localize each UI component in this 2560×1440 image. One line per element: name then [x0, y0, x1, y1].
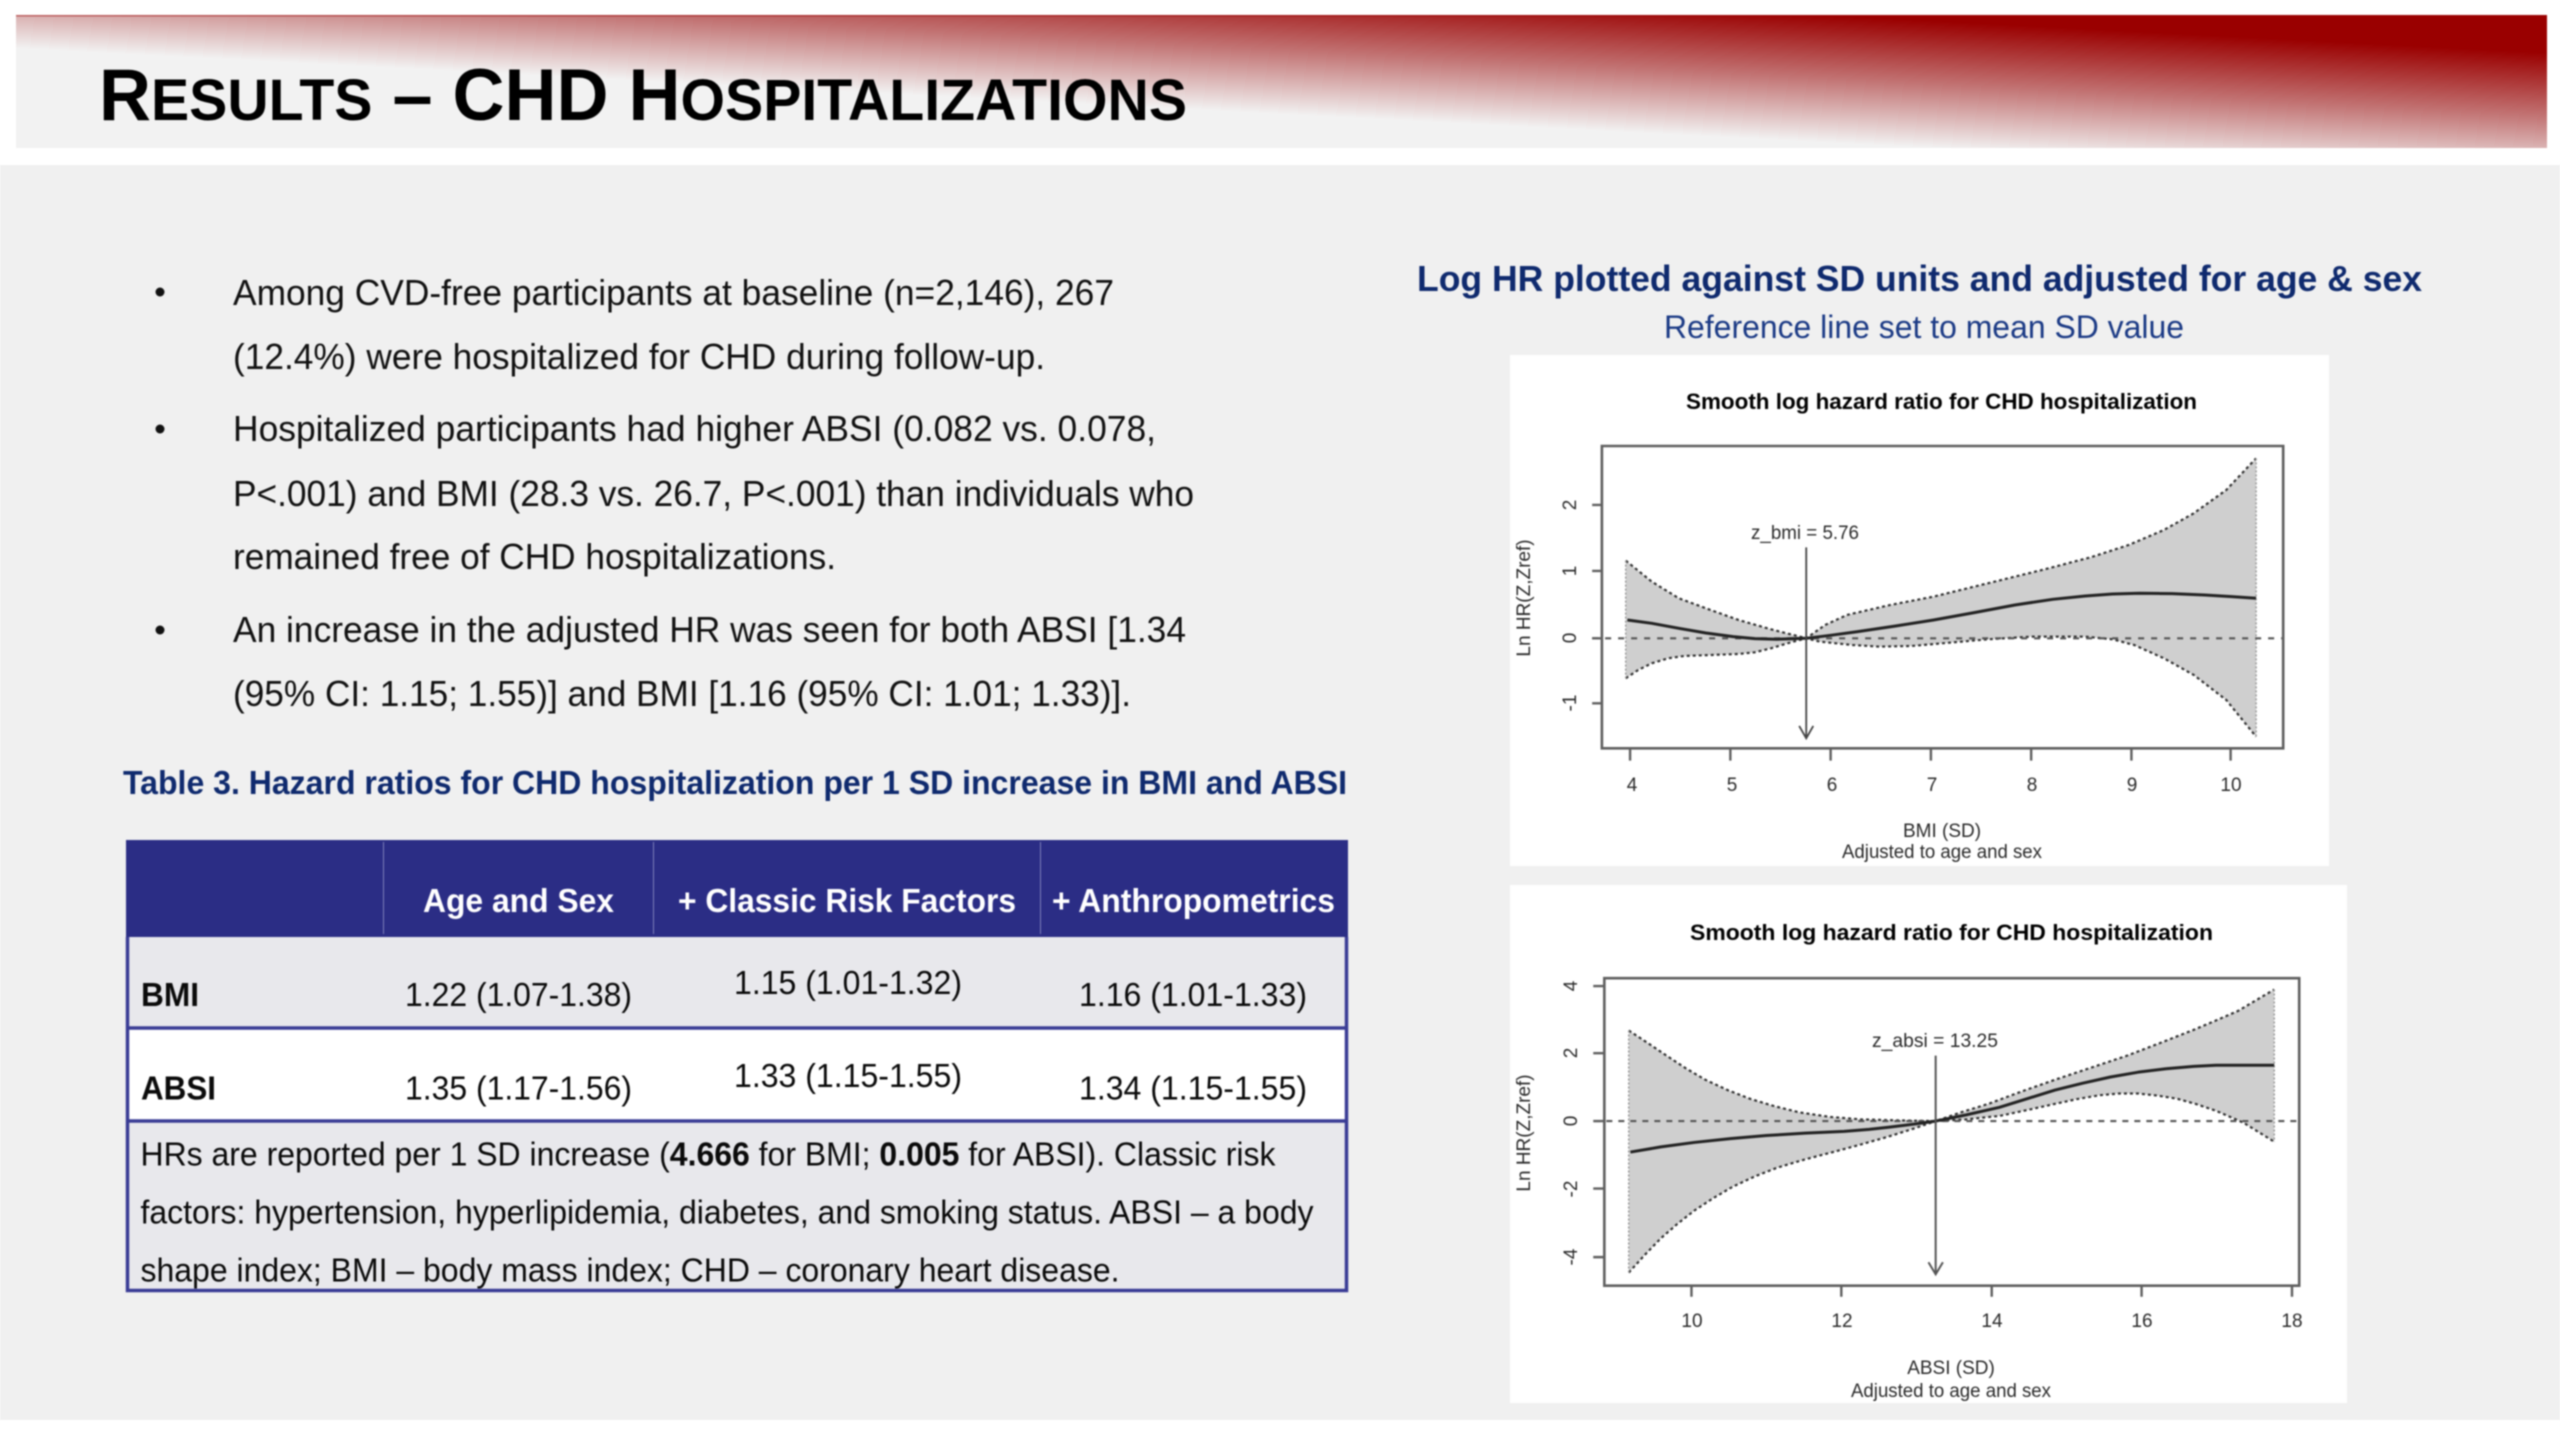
bullet 1: Among CVD-free participants at baseline (n=2,146), 267 — [233, 272, 1114, 313]
plot frame and axes — [1593, 978, 2299, 1297]
row: ABSI — [141, 1057, 1307, 1106]
bullet 2 — [156, 408, 1194, 577]
footnote: factors: hypertension, hyperlipidemia, diabetes, and smoking status. ABSI – a body — [140, 1194, 1314, 1230]
reference label: z_absi = 13.25 — [1872, 1031, 1998, 1052]
hazard ratio curve — [1627, 593, 2256, 639]
x axis tick labels: 6 — [1827, 775, 1837, 796]
y axis tick labels: 0 — [1561, 1116, 1582, 1126]
footnote — [140, 1136, 1314, 1288]
x axis tick labels: 7 — [1927, 775, 1937, 796]
row: ABSI: 1.35 (1.17-1.56) — [405, 1070, 632, 1106]
x axis label: Adjusted to age and sex — [1851, 1381, 2051, 1402]
y axis tick labels: 0 — [1560, 633, 1581, 643]
reference line — [1592, 637, 2283, 639]
table header row — [126, 840, 1348, 937]
reference arrow — [1928, 1056, 1943, 1274]
x axis tick labels: 10 — [1681, 1311, 1703, 1332]
table rules and outline — [127, 937, 1347, 1290]
row: ABSI: 1.33 (1.15-1.55) — [734, 1057, 962, 1094]
table heading: Table 3. Hazard ratios for CHD hospitalization per 1 SD increase in BMI and ABSI — [123, 764, 1347, 801]
bullet 1 — [156, 272, 1114, 377]
plot frame and axes — [1592, 446, 2283, 761]
x axis tick labels: 4 — [1627, 775, 1638, 796]
row: BMI: 1.16 (1.01-1.33) — [1079, 976, 1307, 1013]
title: RESULTS – CHD HOSPITALIZATIONS — [99, 55, 1187, 136]
reference arrow — [1799, 547, 1813, 738]
reference line — [1594, 1120, 2299, 1122]
y axis tick labels: -1 — [1560, 695, 1581, 711]
bullet 3: (95% CI: 1.15; 1.55)] and BMI [1.16 (95% CI: 1.01; 1.33)]. — [233, 673, 1131, 714]
x axis tick labels: 9 — [2127, 775, 2137, 796]
chart: ABSI smooth log hazard ratio — [1510, 885, 2347, 1403]
x axis label: ABSI (SD) — [1907, 1358, 1995, 1379]
x axis tick labels: 16 — [2131, 1311, 2153, 1332]
reference label: z_bmi = 5.76 — [1751, 523, 1859, 544]
panel: bullet points — [156, 272, 1194, 714]
x axis tick labels: 12 — [1831, 1311, 1853, 1332]
confidence band — [1629, 990, 2274, 1273]
band edges — [1629, 990, 2274, 1273]
y axis tick labels: -2 — [1561, 1181, 1582, 1197]
y axis tick labels: -4 — [1561, 1248, 1582, 1265]
table header row: + Classic Risk Factors — [678, 882, 1016, 919]
footnote: shape index; BMI – body mass index; CHD – coronary heart disease. — [140, 1252, 1120, 1288]
chart: BMI smooth log hazard ratio — [1510, 355, 2329, 866]
bullet 3: An increase in the adjusted HR was seen for both ABSI [1.34 — [233, 609, 1186, 650]
table: hazard ratios — [126, 840, 1348, 1291]
footnote: HRs are reported per 1 SD increase (4.666 for BMI; 0.005 for ABSI). Classic risk — [140, 1136, 1276, 1172]
y axis label: Ln HR(Z,Zref) — [1514, 1074, 1535, 1192]
chart title: Smooth log hazard ratio for CHD hospitalization — [1686, 389, 2197, 414]
plot area — [1592, 446, 2283, 761]
y axis tick labels: 1 — [1560, 566, 1581, 576]
row: ABSI: ABSI — [141, 1070, 216, 1106]
x axis label: Adjusted to age and sex — [1842, 842, 2042, 863]
hazard ratio curve — [1630, 1065, 2274, 1152]
table header row: Age and Sex — [423, 882, 615, 919]
bullet 3 — [156, 609, 1186, 714]
x axis tick labels: 8 — [2027, 775, 2037, 796]
x axis label: BMI (SD) — [1903, 821, 1981, 842]
x axis tick labels: 10 — [2220, 775, 2242, 796]
confidence limit: upper — [1629, 990, 2274, 1121]
x axis label — [1851, 1358, 2051, 1402]
y axis label: Ln HR(Z,Zref) — [1514, 539, 1535, 657]
row: BMI: BMI — [141, 976, 199, 1013]
y axis tick labels: 2 — [1560, 500, 1581, 510]
bullet 1: (12.4%) were hospitalized for CHD during follow-up. — [233, 336, 1045, 377]
chart title: Smooth log hazard ratio for CHD hospitalization — [1690, 920, 2213, 945]
x axis tick labels — [1681, 1311, 2303, 1332]
confidence limit: lower — [1626, 637, 2256, 737]
y axis tick labels: 2 — [1561, 1048, 1582, 1058]
y axis tick labels: 4 — [1561, 980, 1582, 991]
plot area — [1593, 978, 2299, 1297]
table header row: + Anthropometrics — [1052, 882, 1335, 919]
bullet 2: remained free of CHD hospitalizations. — [233, 536, 836, 577]
bullet 2: Hospitalized participants had higher ABSI (0.082 vs. 0.078, — [233, 408, 1156, 449]
x axis label — [1842, 821, 2042, 863]
x axis tick labels — [1627, 775, 2242, 796]
chart subheading: Reference line set to mean SD value — [1664, 309, 2184, 345]
confidence limit: lower — [1629, 1094, 2274, 1273]
x axis tick labels: 5 — [1727, 775, 1737, 796]
confidence band — [1626, 458, 2256, 737]
bullet 2: P<.001) and BMI (28.3 vs. 26.7, P<.001) than individuals who — [233, 473, 1194, 514]
x axis tick labels: 14 — [1981, 1311, 2003, 1332]
row: ABSI: 1.34 (1.15-1.55) — [1079, 1070, 1307, 1106]
band edges — [1626, 458, 2256, 737]
row: BMI: 1.15 (1.01-1.32) — [734, 964, 962, 1001]
confidence limit: upper — [1626, 458, 2256, 638]
y axis tick labels — [1560, 500, 1581, 711]
row: BMI — [141, 964, 1307, 1013]
y axis tick labels — [1561, 980, 1582, 1265]
chart heading: Log HR plotted against SD units and adjusted for age & sex — [1417, 258, 2422, 299]
x axis tick labels: 18 — [2281, 1311, 2303, 1332]
row: BMI: 1.22 (1.07-1.38) — [405, 976, 632, 1013]
header banner — [16, 15, 2547, 148]
